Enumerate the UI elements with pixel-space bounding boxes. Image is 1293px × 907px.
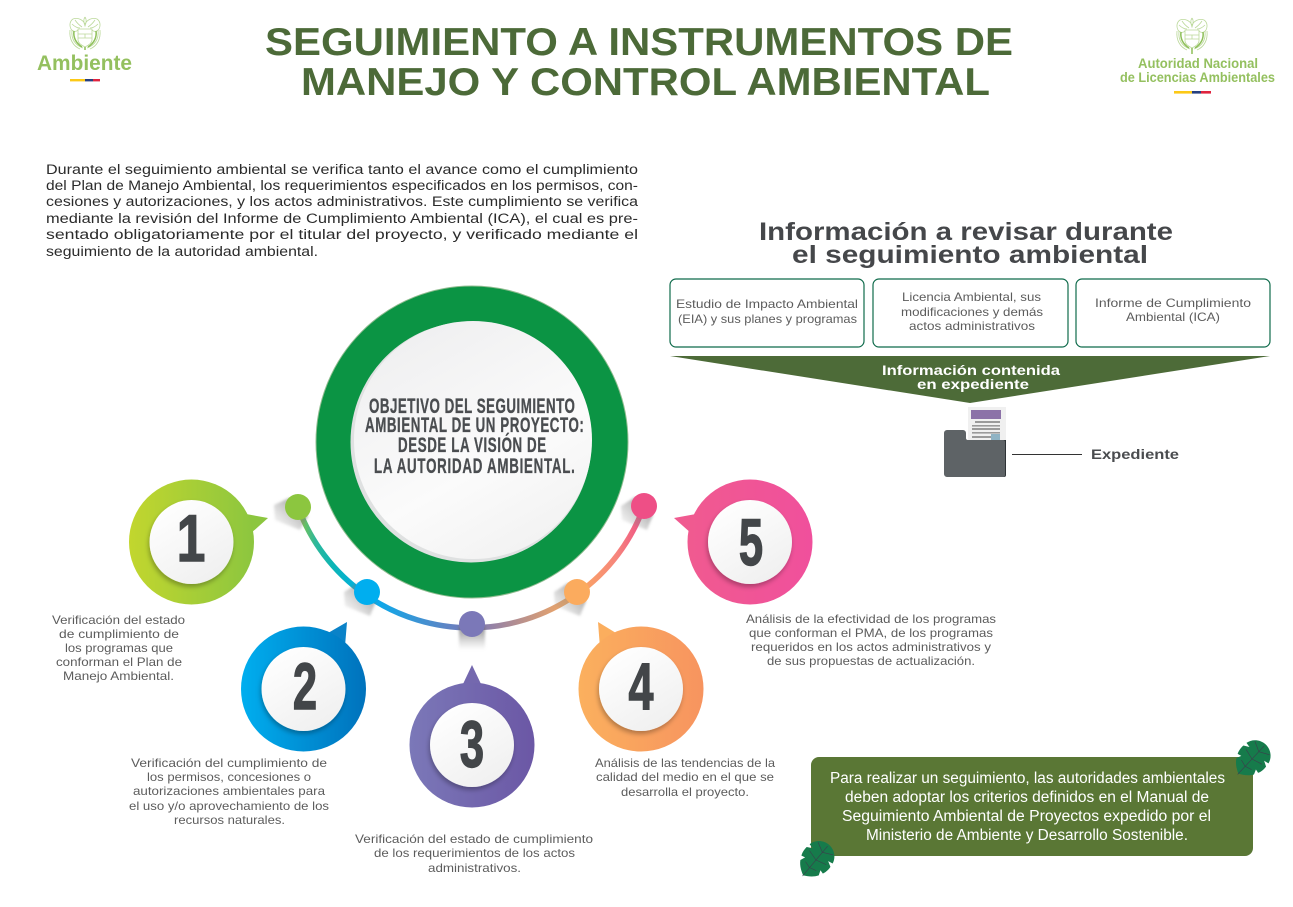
logo: Autoridad Nacional de Licencias Ambientales	[1120, 18, 1275, 94]
step 2 text: los permisos, concesiones o	[147, 770, 311, 784]
funnel banner: en expediente	[917, 376, 1029, 392]
flag bar	[70, 79, 100, 81]
box: EIA: (EIA) y sus planes y programas	[678, 312, 857, 326]
step 1 text: Verificación del estado	[52, 613, 185, 627]
step 1 badge	[129, 480, 268, 604]
step 3 text: Verificación del estado de cumplimiento	[355, 832, 594, 846]
icon: coat of arms	[70, 17, 100, 50]
objective heading: DESDE LA VISIÓN DE	[398, 432, 546, 457]
icon: coat of arms	[1177, 18, 1207, 54]
step 5 text: Análisis de la efectividad de los programas	[746, 612, 996, 626]
step 1 text: los programas que	[65, 641, 173, 655]
intro paragraph	[46, 162, 639, 259]
objective heading: AMBIENTAL DE UN PROYECTO:	[365, 413, 584, 437]
callout: manual de seguimiento	[811, 757, 1253, 856]
funnel banner	[670, 356, 1270, 403]
step 2 text	[129, 756, 329, 827]
section heading: information to review: el seguimiento ambiental	[792, 241, 1148, 269]
step 5 badge	[674, 480, 812, 604]
icon: leaf bottom left	[791, 835, 841, 886]
step 4 text: desarrolla el proyecto.	[621, 785, 749, 799]
step 5 text: de sus propuestas de actualización.	[767, 654, 975, 668]
box: ICA: Informe de Cumplimiento	[1095, 296, 1252, 310]
step 5 badge: 5	[739, 505, 763, 579]
step 2 text: el uso y/o aprovechamiento de los	[129, 799, 329, 813]
section heading: information to review: Información a revisar durante	[759, 218, 1173, 246]
step 2 badge: 2	[293, 649, 317, 723]
intro paragraph: seguimiento de la autoridad ambiental.	[46, 244, 318, 259]
step 1 badge: 1	[177, 501, 205, 575]
step 4 badge: 4	[629, 649, 654, 723]
box: EIA	[670, 279, 864, 347]
icon: folder with document	[944, 407, 1006, 477]
objective heading	[365, 394, 584, 478]
flag bar	[1174, 91, 1211, 94]
objective heading: LA AUTORIDAD AMBIENTAL.	[374, 454, 575, 478]
step 1 text: de cumplimiento de	[59, 627, 180, 641]
dot 4	[554, 579, 590, 616]
box: licencia ambiental: modificaciones y demás	[901, 305, 1043, 319]
icon: leaf top right	[1226, 734, 1277, 785]
step 1 text: Manejo Ambiental.	[63, 669, 174, 683]
step 3 text: de los requerimientos de los actos	[374, 846, 575, 860]
box: licencia ambiental	[873, 279, 1068, 347]
expediente label: Expediente	[1091, 446, 1179, 462]
callout text: Seguimiento Ambiental de Proyectos expedido por el	[842, 808, 1211, 825]
title: MANEJO Y CONTROL AMBIENTAL	[301, 61, 990, 104]
step 1 text	[52, 613, 185, 683]
dot 2	[344, 579, 380, 616]
step 4 text: calidad del medio en el que se	[596, 770, 774, 784]
callout text: Para realizar un seguimiento, las autoridades ambientales	[830, 770, 1225, 787]
step 5 text: requeridos en los actos administrativos y	[751, 640, 991, 654]
step 4 text: Análisis de las tendencias de la	[595, 756, 775, 770]
central objective circle	[316, 286, 628, 598]
objective heading: OBJETIVO DEL SEGUIMIENTO	[369, 394, 575, 418]
box: EIA: Estudio de Impacto Ambiental	[676, 297, 858, 311]
callout text	[830, 770, 1225, 844]
step 2 text: Verificación del cumplimiento de	[131, 756, 327, 770]
funnel banner: Información contenida	[882, 362, 1060, 378]
box: ICA: Ambiental (ICA)	[1126, 310, 1220, 324]
wordmark: de Licencias Ambientales	[1120, 70, 1275, 85]
intro paragraph: mediante la revisión del Informe de Cumplimiento Ambiental (ICA), el cual es pre-	[46, 211, 638, 226]
connecting arc timeline	[274, 493, 657, 650]
callout text: Ministerio de Ambiente y Desarrollo Sostenible.	[866, 827, 1188, 844]
step 4 text	[595, 756, 775, 799]
dot 3	[459, 611, 485, 650]
intro paragraph: cesiones y autorizaciones, y los actos administrativos. Este cumplimiento se verifica	[46, 194, 639, 209]
wordmark: Ambiente	[37, 52, 132, 75]
section heading: information to review	[759, 218, 1173, 269]
step 5 text: que conforman el PMA, de los programas	[749, 626, 993, 640]
intro paragraph: Durante el seguimiento ambiental se verifica tanto el avance como el cumplimiento	[46, 162, 638, 177]
intro paragraph: sentado obligatoriamente por el titular del proyecto, y verificado mediante el	[46, 227, 638, 242]
box: licencia ambiental: Licencia Ambiental, sus	[902, 290, 1041, 304]
step 2 text: autorizaciones ambientales para	[133, 784, 325, 798]
box: licencia ambiental: actos administrativos	[909, 319, 1035, 333]
box: ICA	[1076, 279, 1270, 347]
step 3 text: administrativos.	[428, 861, 521, 875]
wordmark	[1120, 56, 1275, 85]
step 3 text	[355, 832, 594, 875]
step 1 text: conforman el Plan de	[56, 655, 182, 669]
intro paragraph: del Plan de Manejo Ambiental, los requerimientos especificados en los permisos, con-	[46, 178, 638, 193]
step 3 badge: 3	[460, 707, 484, 781]
title: SEGUIMIENTO A INSTRUMENTOS DE	[265, 21, 1013, 64]
step 2 badge	[241, 622, 366, 752]
step 4 badge	[578, 622, 704, 752]
step 2 text: recursos naturales.	[174, 813, 285, 827]
callout text: deben adoptar los criterios definidos en el Manual de	[845, 789, 1209, 806]
dot 1	[274, 494, 311, 530]
dot 5	[621, 493, 657, 530]
step 5 text	[746, 612, 996, 668]
logo: Ambiente	[37, 17, 132, 81]
title	[265, 21, 1013, 104]
step 3 badge	[410, 665, 534, 808]
wordmark: Autoridad Nacional	[1138, 56, 1258, 71]
